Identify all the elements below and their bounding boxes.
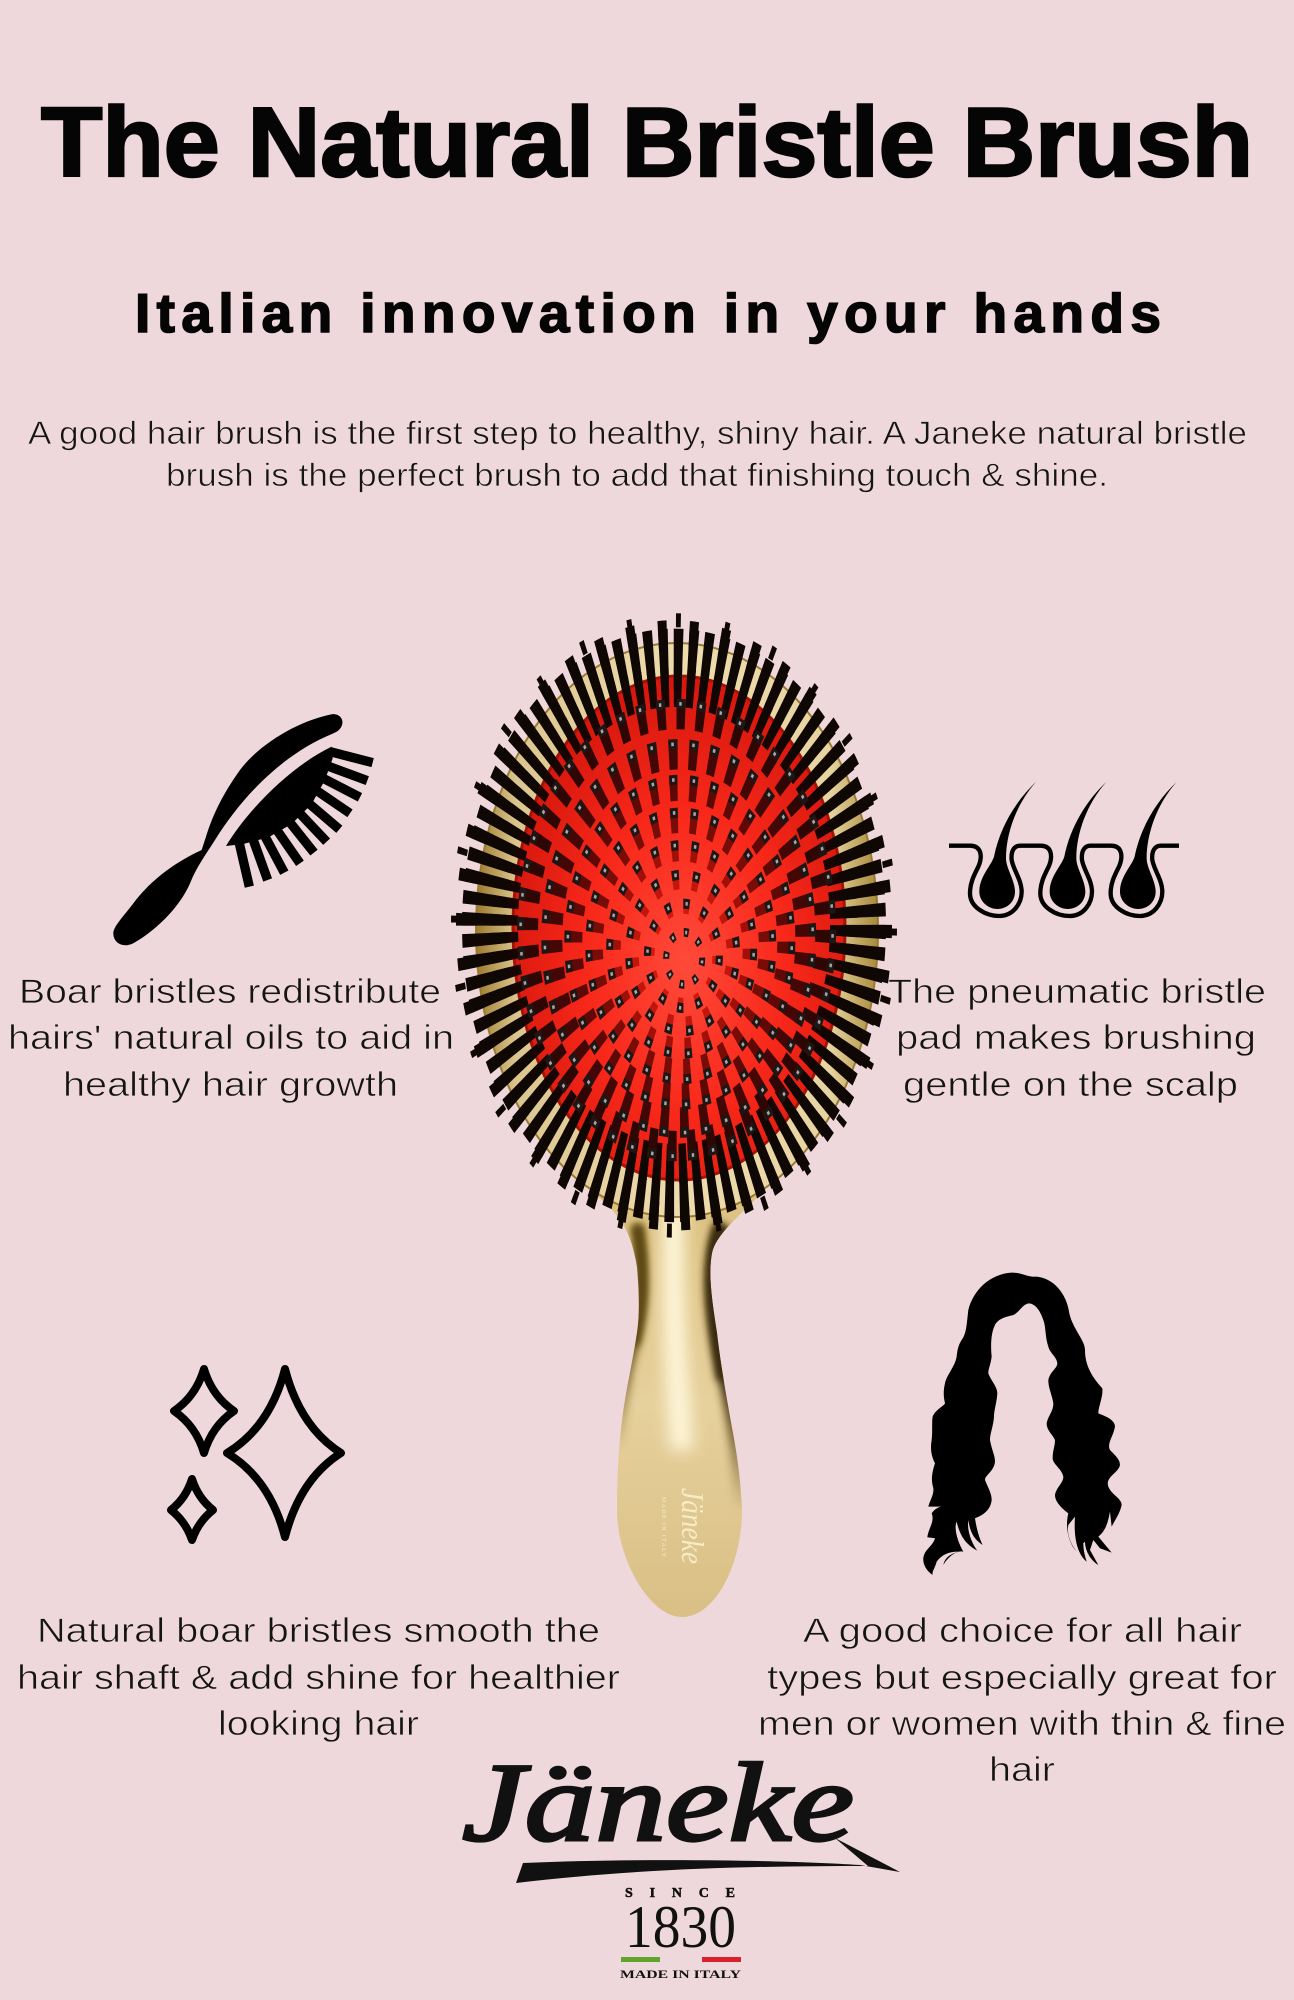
- handle engraving: [660, 1488, 711, 1564]
- year: 1830: [625, 1894, 736, 1960]
- text: pneumatic pad: The pneumatic bristle: [888, 973, 1266, 1011]
- text: smooth and shine: looking hair: [218, 1705, 419, 1743]
- red cushion pad: [513, 676, 845, 1180]
- icon: long wavy hair: [923, 1273, 1122, 1575]
- text: boar bristles oils: healthy hair growth: [63, 1066, 398, 1104]
- text: smooth and shine: hair shaft & add shine for healthier: [17, 1659, 620, 1697]
- handle engraving: Jäneke: [675, 1488, 711, 1564]
- text: all hair types: A good choice for all hair: [803, 1612, 1242, 1650]
- handle engraving: MADE IN ITALY: [660, 1497, 666, 1558]
- bristle tuft rows: tails: [531, 718, 823, 1142]
- text: boar bristles oils: [8, 973, 454, 1104]
- brush handle: [598, 1195, 757, 1617]
- text: pneumatic pad: gentle on the scalp: [903, 1066, 1238, 1104]
- logo swoosh: [516, 1838, 900, 1883]
- icon: hair follicles: [949, 782, 1179, 916]
- text: pneumatic pad: [888, 973, 1266, 1104]
- intro text: brush is the perfect brush to add that finishing touch & shine.: [166, 457, 1108, 493]
- brush photo illustration: [456, 620, 892, 1620]
- text: all hair types: [758, 1612, 1286, 1789]
- intro text: A good hair brush is the first step to healthy, shiny hair. A Janeke natural bristle: [28, 415, 1247, 451]
- logo wordmark: Jäneke: [462, 1741, 854, 1865]
- gold brush head: [476, 643, 878, 1217]
- text: all hair types: hair: [989, 1751, 1055, 1789]
- logo: Janeke since 1830: [462, 1741, 900, 1981]
- icon: sparkles: [171, 1369, 341, 1540]
- text: pneumatic pad: pad makes brushing: [896, 1019, 1256, 1057]
- since: SINCE: [625, 1886, 735, 1901]
- outer bristle fringe: [456, 620, 892, 1231]
- text: smooth and shine: [17, 1612, 620, 1743]
- text: boar bristles oils: Boar bristles redistribute: [19, 973, 441, 1011]
- bristle tip highlights: [521, 704, 833, 1156]
- text: boar bristles oils: hairs' natural oils to aid in: [8, 1019, 454, 1057]
- text: smooth and shine: Natural boar bristles smooth the: [37, 1612, 600, 1650]
- made in italy: MADE IN ITALY: [620, 1967, 741, 1981]
- bristle tuft rows: tips: [521, 704, 833, 1156]
- subtitle: Italian innovation in your hands: [135, 282, 1161, 344]
- italian flag bars: [621, 1957, 741, 1962]
- text: all hair types: men or women with thin & fine: [758, 1705, 1286, 1743]
- intro text: [28, 415, 1247, 493]
- title: The Natural Bristle Brush: [41, 87, 1253, 197]
- icon: hair brush: [113, 714, 373, 945]
- text: all hair types: types but especially great for: [767, 1659, 1277, 1697]
